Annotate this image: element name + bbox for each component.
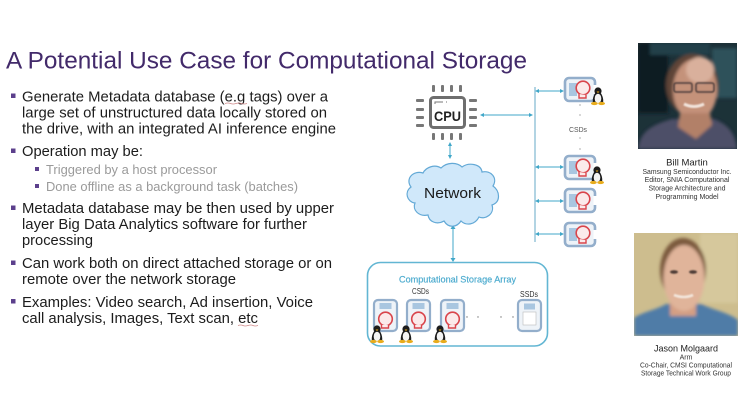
host-attached CSD drives [565,78,605,246]
title: A Potential Use Case for Computational Storage [6,48,527,74]
bullet: examples: Examples: Video search, Ad insertion, Voice [22,294,313,311]
caption: Bill Martin: Editor, SNIA Computational [645,177,730,184]
drive 3 [565,189,596,212]
icon: CPU chip: CPU [434,108,461,124]
panel: Computational Storage Array [368,262,548,346]
drive with penguin 1 [565,78,605,105]
sub-bullets: operation modes: Done offline as a background task (batches) [46,179,298,194]
caption: Bill Martin: Bill Martin [666,158,708,168]
array SSD [518,300,541,331]
bullet list [11,88,336,327]
bullet: examples [11,294,313,327]
photo: Bill Martin [638,43,737,149]
bullet: metadata generation: large set of unstructured data locally stored on [22,104,327,122]
drive with penguin 2 [565,156,604,184]
bullet: big data analytics [11,200,334,249]
caption: Bill Martin: Programming Model [655,194,719,201]
bullet: big data analytics: layer Big Data Analytics software for further [22,216,307,233]
label: CSDs: CSDs [569,125,587,134]
bullet: big data analytics: Metadata database may be then used by upper [22,200,334,217]
bullet: direct or remote: remote over the network storage [22,271,236,288]
bullet: examples: call analysis, Images, Text scan, etc [22,310,258,327]
array CSD 2 [399,300,430,343]
bullet: direct or remote [11,255,332,288]
caption: Bill Martin [642,158,732,201]
sub-bullets: operation modes: Triggered by a host processor [46,162,218,177]
connector arrows [448,87,564,262]
label: CSDs: CSDs [412,287,429,296]
bullet: big data analytics: processing [22,232,93,249]
cloud: Network: Network [424,186,482,202]
array CSD 3 [433,300,464,343]
bullet: direct or remote: Can work both on direct attached storage or on [22,255,332,272]
caption: Jason Molgaard: Arm [680,354,693,362]
caption: Jason Molgaard: Jason Molgaard [654,344,718,354]
photo: Jason Molgaard [634,233,738,336]
sub-bullets: operation modes [35,162,298,194]
bullet: metadata generation: the drive, with an integrated AI inference engine [22,120,336,138]
array CSD 1 [370,300,397,343]
icon: CPU chip [416,85,477,140]
caption: Jason Molgaard: Storage Technical Work Group [641,370,731,378]
bullet: metadata generation: Generate Metadata database (e.g tags) over a [22,88,329,106]
bullet: operation: Operation may be: [22,143,143,160]
label: SSDs: SSDs [520,290,538,299]
caption: Jason Molgaard: Co-Chair, CMSI Computational [640,362,732,370]
drive 4 [565,223,596,246]
bullet: metadata generation [11,88,336,138]
caption: Bill Martin: Storage Architecture and [648,186,726,192]
caption: Jason Molgaard [640,344,732,378]
cloud: Network [407,163,498,226]
caption: Bill Martin: Samsung Semiconductor Inc. [642,169,732,176]
array title: Computational Storage Array [399,274,516,286]
